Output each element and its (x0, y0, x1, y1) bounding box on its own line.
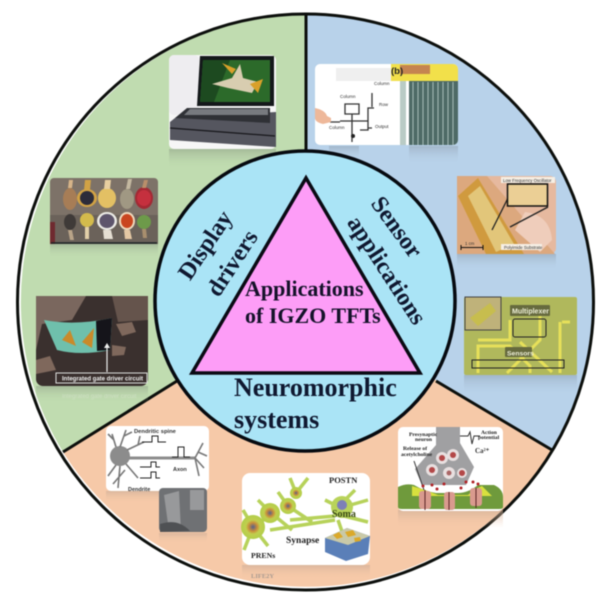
label: integrated gate driver circuit: Integrated gate driver circuit (62, 376, 143, 382)
image: presynaptic neuron and acetylcholine release: Ca²⁺ (475, 447, 490, 455)
image: pixel circuit and sensor array: Output (375, 124, 389, 129)
image: pixel circuit and sensor array: Column (329, 125, 345, 130)
image: pixel circuit and sensor array: (b) (391, 66, 403, 77)
center title: Applications (245, 276, 364, 301)
image: neuron with dendrites and axon (106, 426, 209, 543)
label: sensors: Sensors (507, 350, 534, 358)
center title (245, 276, 381, 328)
image: spices in spoons (50, 178, 158, 258)
image: flexible low frequency oscillator on polyimide: Polyimide Substrate (504, 245, 543, 250)
image: pixel circuit and sensor array (315, 64, 458, 164)
image: flexible low frequency oscillator on polyimide (457, 176, 556, 270)
image: neuron with dendrites and axon: Dendritic spine (134, 429, 177, 435)
image: presynaptic neuron and acetylcholine release: Release of (403, 446, 427, 452)
image: presynaptic neuron and acetylcholine release: potential (478, 435, 500, 441)
heading: display drivers: drivers (202, 226, 264, 301)
inner circle (155, 151, 455, 451)
image: laptop on stack (169, 55, 276, 169)
image: presynaptic neuron and acetylcholine release: Action (481, 430, 498, 436)
image: neural network synapse (241, 473, 370, 580)
image: neuron with dendrites and axon: Dendrite (128, 487, 150, 493)
image: grey photo of device (159, 488, 207, 532)
image: presynaptic neuron and acetylcholine release: Presynaptic (409, 432, 438, 438)
image: neural network synapse: LIFE2Y (251, 573, 274, 580)
image: neuron with dendrites and axon: Axon (173, 467, 187, 473)
image: flexible low frequency oscillator on polyimide: Low Frequency Oscillator (503, 178, 552, 183)
image: neural network synapse: POSTN (329, 475, 358, 485)
central triangle (192, 178, 420, 373)
image: multiplexer and sensors board (464, 297, 577, 395)
label: multiplexer: Multiplexer (512, 308, 549, 316)
heading: display drivers: Display (173, 206, 238, 285)
image: flexible display with integrated gate driver circuit: Integrated gate driver circuit (62, 394, 137, 400)
heading: sensor applications: Sensor (365, 192, 427, 264)
heading: neuromorphic systems (234, 373, 397, 434)
heading: display drivers (173, 206, 264, 301)
center title: of IGZO TFTs (245, 303, 381, 328)
wheel sector: sensor applications (blue) (306, 14, 593, 450)
image: pixel circuit and sensor array: Column (340, 94, 356, 99)
image: pixel circuit and sensor array: Row (379, 102, 389, 107)
image: neural network synapse: Soma (332, 509, 356, 520)
image: neural network synapse: Synapse (286, 536, 319, 546)
wheel sector: display drivers (green) (21, 14, 306, 452)
image: neural network synapse: PRENs (251, 551, 275, 560)
image: pixel circuit and sensor array: Column (374, 81, 390, 86)
wheel sector: neuromorphic systems (orange) (63, 302, 552, 587)
image: presynaptic neuron and acetylcholine release: acetylcholine (401, 452, 433, 458)
heading: sensor applications: applications (341, 211, 431, 330)
image: flexible display with integrated gate driver circuit (36, 296, 148, 403)
image: flexible low frequency oscillator on polyimide: 1 cm (465, 241, 475, 246)
image: presynaptic neuron and acetylcholine release: neuron (415, 437, 433, 443)
heading: neuromorphic systems: systems (234, 405, 319, 434)
image: presynaptic neuron and acetylcholine release (398, 427, 503, 528)
heading: neuromorphic systems: Neuromorphic (234, 373, 397, 402)
